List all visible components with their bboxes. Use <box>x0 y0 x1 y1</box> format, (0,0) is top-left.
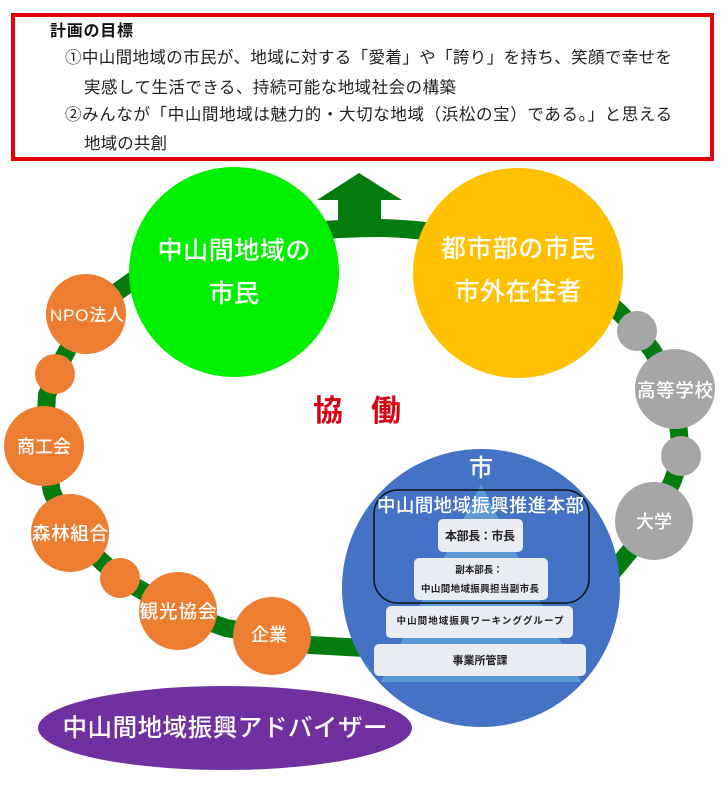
node: tourism association <box>139 572 217 650</box>
node: small orange 2 <box>100 558 140 598</box>
goal 2 text <box>65 105 672 153</box>
circle: urban citizens and outside residents: 都市部の市民 <box>441 235 595 263</box>
box: responsible divisions <box>374 644 586 676</box>
heading: promotion headquarters: 中山間地域振興推進本部 <box>377 495 584 516</box>
node: high schools: 高等学校 <box>637 380 713 401</box>
node: high schools <box>635 349 715 429</box>
circle: urban citizens and outside residents <box>413 168 623 378</box>
bracket: promotion headquarters <box>374 490 589 603</box>
label: collaboration: 協 働 <box>313 395 401 428</box>
box: working group <box>386 606 573 638</box>
heading: city: 市 <box>469 455 493 482</box>
circle: mountain area citizens: 市民 <box>209 280 259 308</box>
box: deputy headquarters leader <box>414 558 548 600</box>
callout: advisor: 中山間地域振興アドバイザー <box>62 714 388 742</box>
collaboration ring <box>44 228 681 648</box>
node: small gray 2 <box>661 436 701 476</box>
box: headquarters leader: 本部長：市長 <box>445 528 515 543</box>
pyramid <box>381 484 581 682</box>
node: tourism association: 観光協会 <box>140 601 217 622</box>
panel: plan goals <box>13 15 712 159</box>
node: chamber of commerce: 商工会 <box>17 437 71 457</box>
node: forestry cooperative: 森林組合 <box>32 523 108 544</box>
panel: city organization <box>342 449 620 727</box>
node: small gray 1 <box>617 311 657 351</box>
goal 1 text: 実感して生活できる、持続可能な地域社会の構築 <box>84 78 456 97</box>
node: university: 大学 <box>636 512 672 532</box>
arrow: up to citizens <box>317 173 402 225</box>
goal 1 text: ①中山間地域の市民が、地域に対する「愛着」や「誇り」を持ち、笑顔で幸せを <box>65 48 672 67</box>
circle: mountain area citizens: 中山間地域の <box>158 237 310 265</box>
node: companies <box>233 597 311 675</box>
goal 2 text: 地域の共創 <box>84 134 167 153</box>
goal 2 text: ②みんなが「中山間地域は魅力的・大切な地域（浜松の宝）である。」と思える <box>65 105 672 124</box>
box: responsible divisions: 事業所管課 <box>452 653 508 667</box>
goal 1 text <box>65 48 672 97</box>
circle: urban citizens and outside residents: 市外在住者 <box>454 278 582 306</box>
box: deputy headquarters leader: 中山間地域振興担当副市長 <box>421 583 539 595</box>
node: university <box>615 482 693 560</box>
callout: advisor <box>38 686 412 770</box>
circle: mountain area citizens <box>129 167 339 377</box>
heading: plan goals: 計画の目標 <box>50 21 133 40</box>
box: working group: 中山間地域振興ワーキンググループ <box>396 615 564 627</box>
node: NPO <box>46 274 126 354</box>
node: forestry cooperative <box>31 494 109 572</box>
box: deputy headquarters leader: 副本部長： <box>455 564 503 576</box>
node: NPO: NPO法人 <box>50 306 124 325</box>
node: companies: 企業 <box>251 625 287 645</box>
box: headquarters leader <box>438 519 523 552</box>
node: chamber of commerce <box>4 406 84 486</box>
node: small orange 1 <box>35 354 75 394</box>
